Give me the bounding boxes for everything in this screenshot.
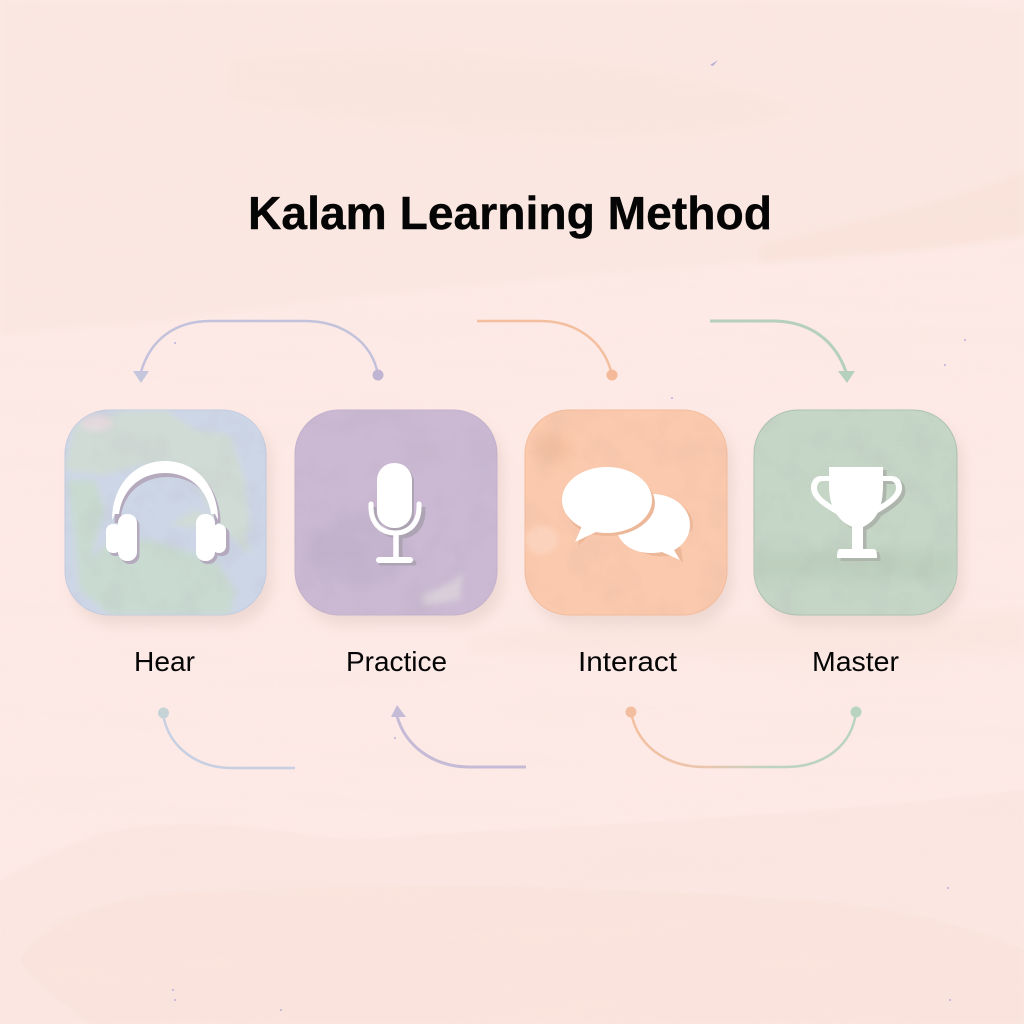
arrow: Interact to Master loop <box>626 706 862 767</box>
arrow: into Master <box>710 321 855 383</box>
arrow: Practice to Hear <box>133 321 384 383</box>
panel: Practice <box>295 410 503 625</box>
panel: Master <box>754 410 963 625</box>
arrow: Interact top <box>477 321 618 380</box>
label: Hear: Hear <box>134 646 195 677</box>
label: Practice: Practice <box>346 646 447 677</box>
title: Kalam Learning Method <box>248 187 772 239</box>
label: Master: Master <box>812 646 899 677</box>
panel: Hear <box>65 410 272 625</box>
icon: microphone <box>371 463 423 563</box>
icon: speech bubbles <box>562 467 693 563</box>
panel: Interact <box>525 410 733 625</box>
icon: trophy <box>811 467 906 561</box>
arrow: Hear bottom <box>158 708 295 768</box>
icon: headphones <box>106 461 230 564</box>
arrow: Practice bottom <box>391 705 526 767</box>
label: Interact: Interact <box>578 646 677 677</box>
